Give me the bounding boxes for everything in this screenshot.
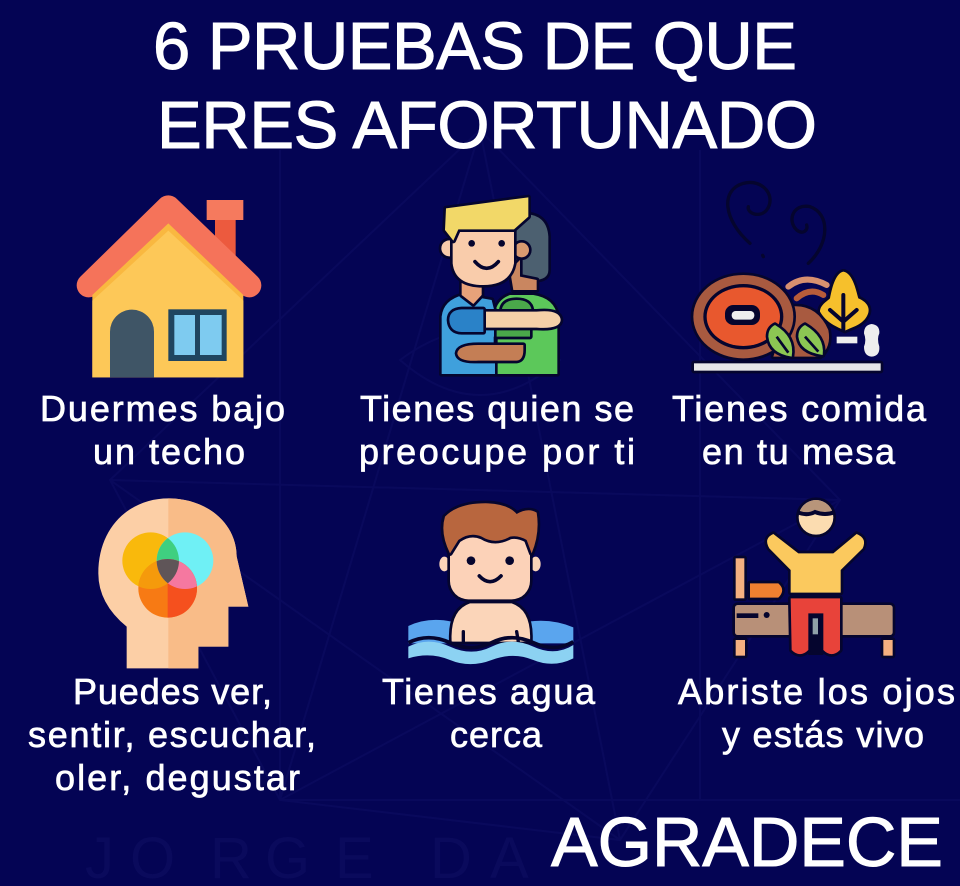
label: Puedes ver, sentir, escuchar, oler, degustar [28, 671, 316, 798]
label: Puedes ver, sentir, escuchar, oler, degustar: Puedes ver, [73, 671, 272, 712]
title: 6 PRUEBAS DE QUE [153, 9, 797, 84]
label: Tienes agua cerca: Tienes agua [382, 671, 596, 712]
label: Tienes agua cerca [382, 671, 596, 755]
icon: plate of food [693, 182, 881, 371]
title [153, 9, 817, 163]
label: Tienes quien se preocupe por ti: Tienes quien se [360, 388, 634, 429]
label: Tienes agua cerca: cerca [450, 714, 543, 755]
label: Tienes quien se preocupe por ti: preocupe por ti [359, 431, 635, 472]
label: Tienes comida en tu mesa [672, 388, 927, 472]
closing word: AGRADECE: AGRADECE [551, 803, 943, 881]
icon: swimmer in water [408, 503, 573, 664]
title: ERES AFORTUNADO [157, 88, 817, 163]
label: Tienes quien se preocupe por ti [359, 388, 635, 472]
icon: hugging people [441, 197, 561, 374]
label: Tienes comida en tu mesa: Tienes comida [672, 388, 927, 429]
label: Duermes bajo un techo: un techo [93, 431, 245, 472]
label: Puedes ver, sentir, escuchar, oler, degustar: sentir, escuchar, [28, 714, 316, 755]
icon: person rising from bed [735, 500, 893, 656]
label: Abriste los ojos y estás vivo: y estás vivo [722, 714, 924, 755]
icon: head with senses [98, 498, 248, 668]
label: Duermes bajo un techo [40, 388, 285, 472]
label: Tienes comida en tu mesa: en tu mesa [702, 431, 896, 472]
label: Abriste los ojos y estás vivo: Abriste los ojos [678, 671, 955, 712]
label: Abriste los ojos y estás vivo [678, 671, 955, 755]
label: Duermes bajo un techo: Duermes bajo [40, 388, 285, 429]
label: Puedes ver, sentir, escuchar, oler, degustar: oler, degustar [55, 757, 300, 798]
icon: house [89, 200, 249, 377]
